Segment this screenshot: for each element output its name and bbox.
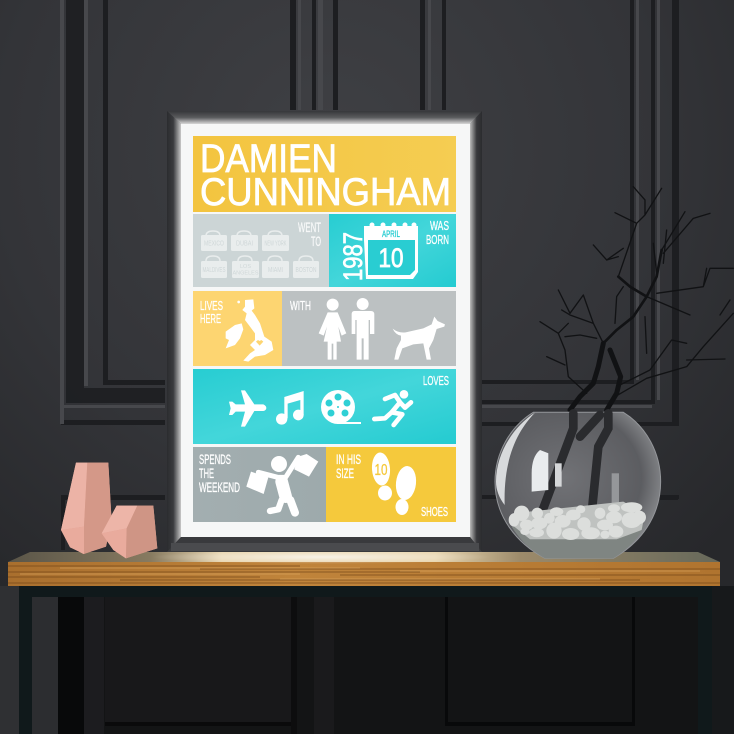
branches	[540, 187, 733, 410]
table legs and rail	[19, 586, 712, 734]
reflection highlights	[496, 413, 619, 505]
panel: was born	[329, 214, 456, 287]
branches inside the bowl	[543, 413, 608, 513]
label: in his size: SIZE	[336, 465, 354, 481]
birth year: 1987	[338, 232, 368, 281]
short pink vase	[102, 506, 157, 558]
label: was born	[426, 218, 449, 247]
label: spends the weekend: WEEKEND	[199, 479, 240, 495]
icon: film reel	[321, 390, 361, 424]
tall pink vase	[61, 463, 112, 554]
icon: airplane	[229, 390, 266, 427]
label: was born: BORN	[426, 232, 449, 247]
label: lives here: LIVES	[200, 298, 223, 313]
panel: name title	[193, 136, 456, 214]
label: spends the weekend	[199, 451, 240, 495]
icon: calendar: 10	[378, 243, 404, 273]
light glow under frame	[152, 550, 492, 564]
icons: suitcases with destinations	[201, 231, 319, 278]
label: went to: WENT	[298, 219, 321, 235]
label: went to: TO	[311, 233, 321, 249]
upper wall moulding bands	[61, 0, 679, 550]
panel: lives with	[282, 291, 456, 366]
label: with: WITH	[290, 298, 311, 313]
icons: suitcases with destinations: MALDIVES	[202, 267, 226, 274]
icons: suitcases with destinations: DUBAI	[236, 240, 253, 248]
table	[8, 552, 720, 734]
lower wall moulding	[58, 597, 635, 734]
panel: spends the weekend	[193, 447, 326, 522]
label: shoes: SHOES	[421, 504, 448, 519]
label: loves: LOVES	[423, 373, 449, 388]
label: went to	[298, 219, 321, 249]
glass bowl vase with pebbles	[495, 412, 661, 558]
icons: suitcases with destinations: MEXICO	[204, 240, 224, 248]
glass bowl	[495, 412, 661, 558]
icons: suitcases with destinations: BOSTON	[296, 267, 316, 274]
panel: went to	[193, 214, 329, 287]
icon: dog	[393, 317, 445, 360]
water base	[512, 527, 644, 558]
panel: loves	[193, 369, 456, 444]
heading: first name: DAMIEN	[200, 137, 337, 181]
label: spends the weekend: THE	[199, 465, 214, 481]
panel: shoe size	[326, 447, 456, 522]
panel: lives here	[193, 291, 282, 366]
icon: calendar	[364, 222, 418, 279]
label: in his size	[336, 451, 361, 481]
icons: suitcases with destinations: ANGELES	[233, 270, 259, 276]
pink geometric vases	[61, 463, 157, 558]
icon: calendar: APRIL	[382, 229, 400, 239]
icons: suitcases with destinations: LOS	[240, 264, 251, 270]
icon: woman	[319, 299, 346, 360]
heading: surname: CUNNINGHAM	[200, 171, 451, 214]
pebbles	[509, 502, 646, 540]
icon: footprints with size: 10	[374, 462, 388, 479]
table top surface	[8, 552, 720, 562]
icon: man	[352, 298, 374, 360]
label: was born: WAS	[430, 218, 449, 233]
icon: map of UK and Ireland	[226, 299, 273, 362]
label: lives here	[200, 298, 223, 326]
light box frame	[167, 111, 482, 552]
icons: suitcases with destinations: MIAMI	[268, 267, 283, 274]
label: lives here: HERE	[200, 311, 221, 326]
lighter moulding highlights	[60, 0, 660, 424]
table wooden front	[8, 562, 720, 586]
icon: shopper with bags	[246, 454, 318, 513]
icon: music notes	[276, 391, 304, 425]
icons: suitcases with destinations: NEW YORK	[264, 240, 287, 248]
label: spends the weekend: SPENDS	[199, 451, 231, 467]
icon: runner	[374, 390, 411, 425]
label: in his size: IN HIS	[336, 451, 361, 467]
